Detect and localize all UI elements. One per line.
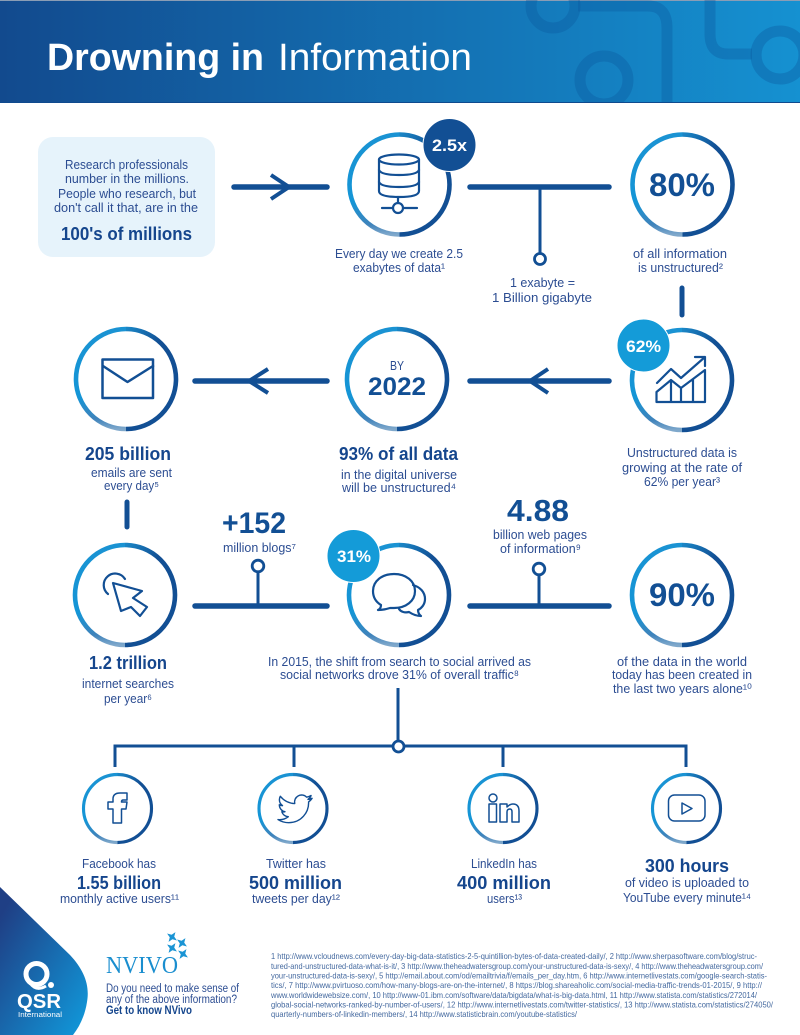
panel: facebook: monthly active users¹¹: [60, 891, 180, 906]
panel: linkedin: 400 million: [457, 873, 551, 893]
icon: database: [379, 154, 419, 213]
tree connector: social networks: [115, 688, 686, 767]
panel: twitter: [249, 774, 342, 906]
panel: youtube: 300 hours: [645, 856, 729, 876]
panel: researchers callout: 100's of millions: [61, 224, 192, 244]
connector: blogs: [195, 507, 327, 606]
panel: 62 percent growth: 62%: [626, 337, 661, 356]
panel: facebook: [60, 774, 180, 906]
panel: by 2022: 93% of all data: [339, 444, 459, 464]
NVivo promo: Get to know NVivo: [106, 1005, 192, 1017]
panel: youtube: of video is uploaded to: [625, 875, 749, 890]
panel: 80 percent: [632, 134, 732, 275]
panel: linkedin: users¹³: [487, 891, 523, 906]
title: Drowning in: [47, 37, 264, 79]
panel: researchers callout: don't call it that, are in the: [54, 200, 198, 215]
panel: email: every day⁵: [104, 478, 159, 493]
panel: 2.5 exabytes: 2.5x: [432, 136, 468, 155]
connector: exabyte note: [470, 187, 609, 305]
panel: 62 percent growth: growing at the rate of: [622, 460, 742, 475]
icon: linkedin: [489, 794, 519, 822]
panel: internet searches: internet searches: [82, 676, 174, 691]
QSR corner logo: QSR: [17, 991, 62, 1013]
panel: 2.5 exabytes: [335, 118, 476, 275]
panel: email: 205 billion: [85, 444, 171, 464]
panel: 90 percent: of the data in the world: [617, 654, 747, 669]
panel: linkedin: [457, 774, 551, 906]
panel: 62 percent growth: [617, 319, 742, 489]
connector: exabyte note: 1 exabyte =: [510, 275, 575, 290]
NVivo promo: any of the above information?: [106, 994, 237, 1006]
panel: internet searches: [75, 545, 175, 706]
footnotes: 1 http://www.vcloudnews.com/every-day-big-data-statistics-2-5-quintillion-bytes-of-data-created-daily/, 2 http://www.sherpasoftware.com/blog/struc-: [271, 951, 757, 961]
panel: youtube: [623, 774, 751, 905]
panel: 80 percent: 80%: [649, 167, 715, 203]
panel: email: [76, 329, 176, 493]
panel: social traffic: In 2015, the shift from search to social arrived as: [268, 654, 531, 669]
panel: researchers callout: [38, 137, 215, 257]
arrow: 2022 to email: [195, 369, 327, 393]
arrow: callout to database: [234, 175, 327, 199]
icon: envelope: [102, 360, 153, 398]
panel: social traffic: [268, 530, 531, 682]
panel: 80 percent: of all information: [633, 246, 727, 261]
panel: 62 percent growth: Unstructured data is: [627, 445, 737, 460]
connector: 80 percent to 62 percent: [680, 288, 684, 315]
panel: linkedin: LinkedIn has: [471, 856, 537, 871]
connector: web pages: [470, 493, 609, 606]
connector: exabyte note: 1 Billion gigabyte: [492, 290, 592, 305]
panel: 90 percent: today has been created in: [612, 667, 752, 682]
panel: facebook: Facebook has: [82, 856, 156, 871]
panel: internet searches: per year⁶: [104, 691, 152, 706]
footnotes: [270, 951, 774, 1019]
panel: twitter: tweets per day¹²: [252, 891, 341, 906]
icon: speech bubbles: [373, 574, 425, 616]
panel: researchers callout: People who research, but: [58, 186, 196, 201]
icon: growth chart: [656, 357, 705, 402]
panel: 2.5 exabytes: Every day we create 2.5: [335, 246, 463, 261]
footnotes: quarterly-numbers-of-linkedin-members/, 14 http://www.statisticbrain.com/youtube-statistics/: [271, 1009, 578, 1019]
panel: 90 percent: [612, 545, 752, 696]
panel: social traffic: 31%: [337, 547, 371, 566]
header banner: [0, 0, 800, 104]
panel: by 2022: [339, 329, 459, 495]
footnotes: www.worldwidewebsize.com/, 10 http://www-01.ibm.com/software/data/bigdata/what-is-big-data.html, 11 http://www.statista.com/statistics/272014/: [270, 990, 758, 1000]
NVivo promo: [106, 929, 240, 1017]
NVivo promo: NVIVO: [106, 953, 178, 979]
NVivo promo: Do you need to make sense of: [106, 983, 240, 995]
panel: researchers callout: number in the millions.: [65, 171, 189, 186]
QSR corner logo: International: [18, 1012, 63, 1019]
panel: researchers callout: Research professionals: [65, 157, 188, 172]
panel: twitter: 500 million: [249, 873, 342, 893]
panel: by 2022: 2022: [368, 373, 426, 401]
QSR corner logo: [0, 887, 88, 1035]
arrow: 62 percent to 2022: [470, 369, 609, 393]
connector: web pages: billion web pages: [493, 527, 587, 542]
icon: video player: [668, 795, 705, 821]
icon: facebook: [108, 793, 127, 823]
connector: blogs: +152: [222, 507, 286, 540]
panel: by 2022: will be unstructured⁴: [341, 480, 456, 495]
connector: web pages: 4.88: [507, 493, 569, 528]
panel: 90 percent: 90%: [649, 577, 715, 613]
footnotes: tics/, 7 http://www.pvirtuoso.com/how-many-blogs-are-on-the-internet/, 8 https://blog.shareaholic.com/social-media-traffic-trends-01-2015/, 9 http://: [271, 980, 763, 990]
panel: youtube: YouTube every minute¹⁴: [623, 890, 751, 905]
panel: by 2022: BY: [390, 358, 404, 373]
panel: 62 percent growth: 62% per year³: [644, 474, 721, 489]
panel: social traffic: social networks drove 31% of overall traffic⁸: [280, 667, 519, 682]
panel: email: emails are sent: [91, 465, 172, 480]
panel: 80 percent: is unstructured²: [638, 260, 724, 275]
panel: 2.5 exabytes: exabytes of data¹: [353, 260, 446, 275]
panel: facebook: 1.55 billion: [77, 873, 161, 893]
panel: internet searches: 1.2 trillion: [89, 653, 167, 673]
connector: blogs: million blogs⁷: [223, 540, 296, 555]
title light part: Information: [278, 37, 472, 79]
icon: twitter bird: [278, 795, 312, 823]
icon: cursor: [104, 574, 147, 616]
panel: 90 percent: the last two years alone¹⁰: [613, 681, 752, 696]
connector: web pages: of information⁹: [500, 541, 581, 556]
connector: email to searches: [124, 502, 130, 527]
panel: by 2022: in the digital universe: [341, 467, 457, 482]
panel: twitter: Twitter has: [266, 856, 326, 871]
